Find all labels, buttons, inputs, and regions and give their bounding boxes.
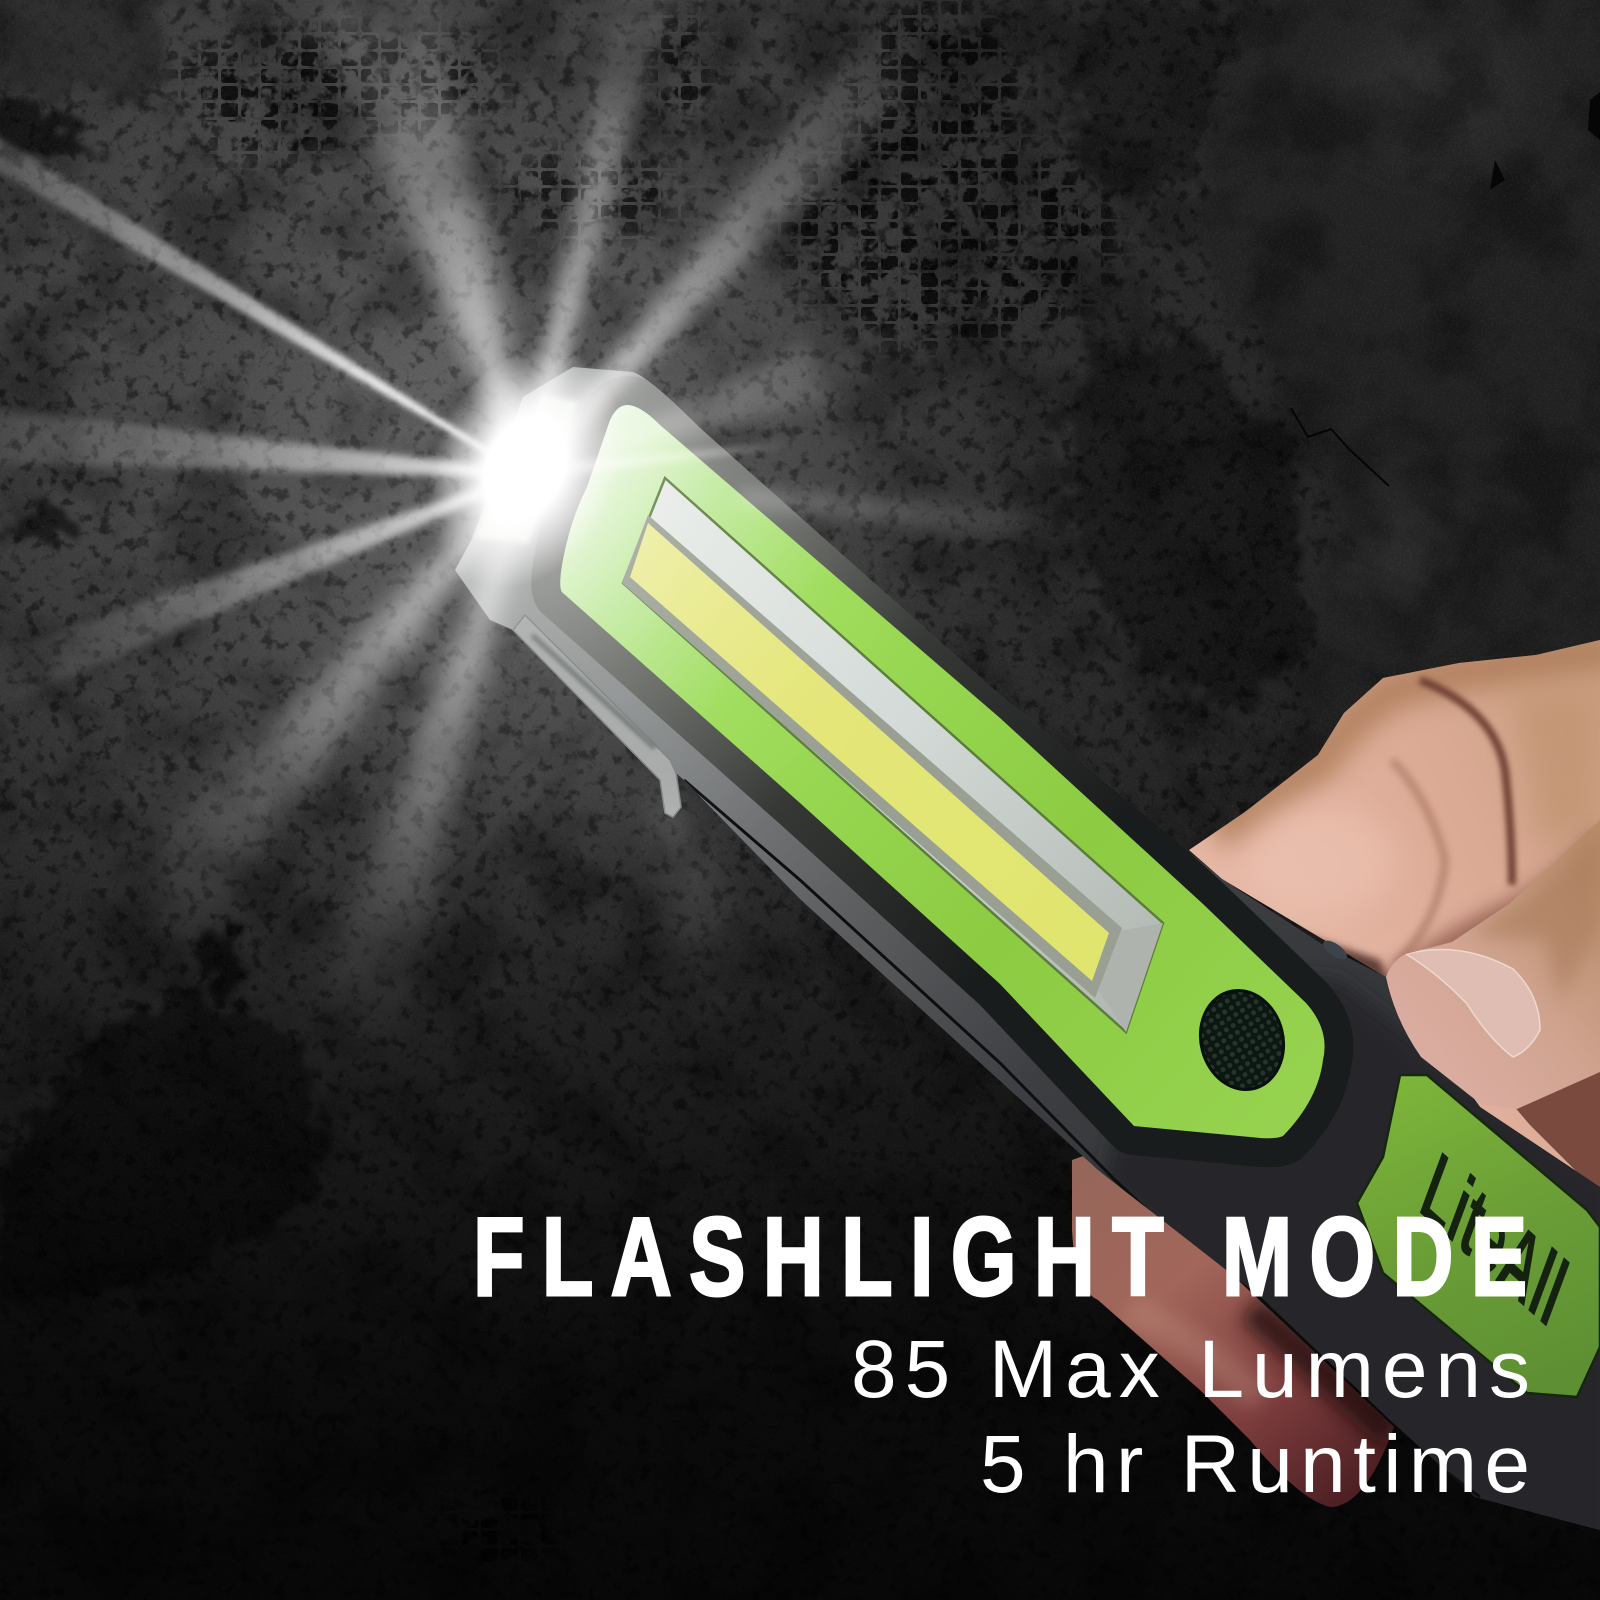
- wide downward ray: [290, 474, 531, 1100]
- spec: runtime: 5 hr Runtime: [980, 1419, 1530, 1510]
- faint lower-right ray: [650, 790, 830, 1120]
- side button nub: [1320, 937, 1350, 963]
- yellow COB LED strip: [630, 523, 1109, 981]
- green face panel: [560, 405, 1325, 1138]
- thumb over the handle: [1380, 810, 1600, 1120]
- lower fingers: [1072, 1156, 1394, 1507]
- palm behind handle: [1500, 1060, 1600, 1195]
- up-right ray: [523, 20, 930, 480]
- belt clip: [513, 615, 681, 817]
- front LED lens: [475, 395, 578, 543]
- green handle label: [1357, 1075, 1600, 1397]
- wide up-left ray: [300, 0, 531, 476]
- heading: flashlight mode: FLASHLIGHT MODE: [473, 1195, 1527, 1319]
- power button: [1190, 982, 1294, 1098]
- core glare: [391, 317, 659, 619]
- lower-left ray: [0, 472, 525, 715]
- faint right rays: [600, 340, 830, 455]
- wide ambient glow: [180, 130, 940, 890]
- sharp long ray: [0, 128, 525, 476]
- upper fingers: [1189, 640, 1600, 1172]
- upward ray: [521, 0, 680, 474]
- spec: lumens: 85 Max Lumens: [851, 1324, 1530, 1415]
- dark rubber band around green panel: [560, 405, 1325, 1138]
- seam line: [684, 780, 1480, 1497]
- horizontal glare streak: [530, 445, 790, 480]
- flashlight body: [455, 367, 1600, 1560]
- left ray: [0, 400, 525, 478]
- thumbnail: [1406, 949, 1540, 1057]
- COB light window: [622, 478, 1163, 1032]
- smooth plaster on right side: [1205, 0, 1600, 800]
- hand: fingers behind the flashlight: [1060, 630, 1600, 1520]
- wide lower-left ray: [95, 472, 529, 965]
- light rays and glare: [0, 0, 1130, 1120]
- dark rubber handle section: [1100, 960, 1600, 1560]
